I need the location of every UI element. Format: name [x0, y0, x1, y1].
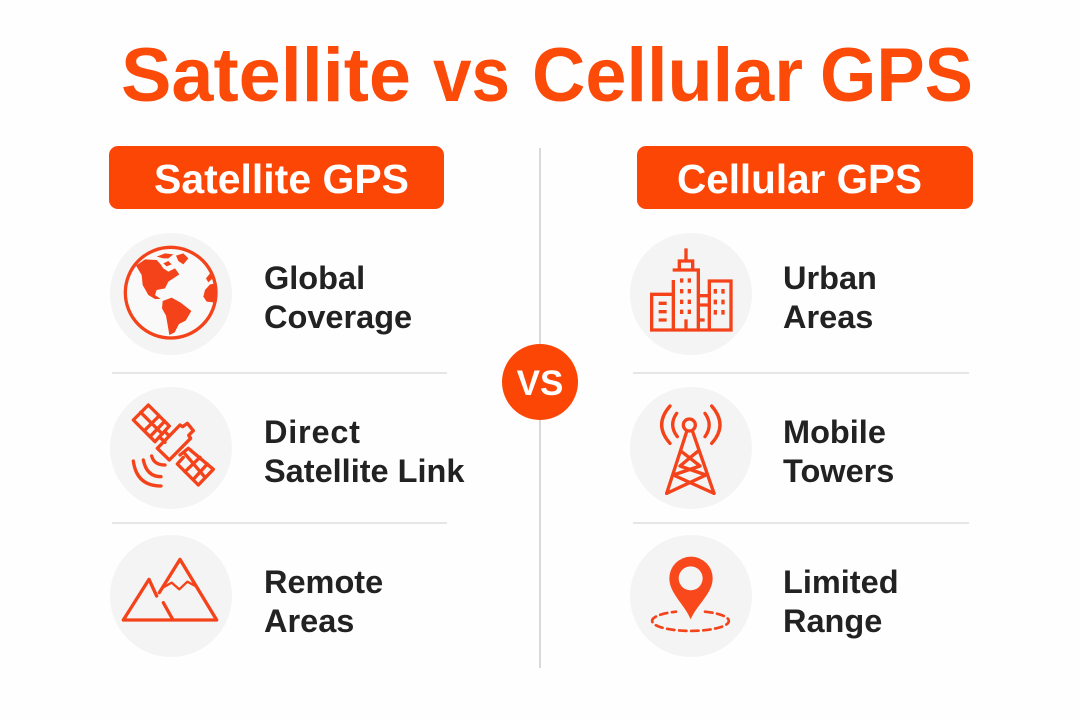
- text: Remote Areas: Areas: [264, 603, 354, 639]
- text: Mobile Towers: [783, 414, 894, 489]
- item: global coverage: [110, 233, 412, 355]
- vs badge: [502, 344, 578, 420]
- text: Global Coverage: Global: [264, 260, 365, 296]
- item: direct satellite link: [110, 387, 465, 509]
- heading: Satellite GPS: Satellite GPS: [154, 156, 409, 202]
- heading: Cellular GPS: Cellular GPS: [677, 156, 922, 202]
- icon: location pin with dashed range: [652, 557, 729, 631]
- text: Global Coverage: [264, 260, 412, 335]
- title: vs: [433, 33, 510, 118]
- text: Direct Satellite Link: Direct: [264, 414, 360, 450]
- title: Satellite: [121, 33, 411, 118]
- icon: city: [652, 248, 731, 330]
- text: Mobile Towers: Towers: [783, 453, 894, 489]
- item: remote areas: [110, 535, 383, 657]
- title: Cellular: [532, 33, 803, 118]
- text: Direct Satellite Link: Satellite Link: [264, 453, 465, 489]
- item: mobile towers: [630, 387, 894, 509]
- text: Remote Areas: Remote: [264, 564, 383, 600]
- text: Urban Areas: Urban: [783, 260, 877, 296]
- title: GPS: [820, 33, 973, 118]
- text: Global Coverage: Coverage: [264, 299, 412, 335]
- icon: mountains: [123, 559, 217, 620]
- text: Limited Range: Limited: [783, 564, 899, 600]
- vs badge: VS: [517, 364, 563, 403]
- item: limited range: [630, 535, 899, 657]
- center divider: [539, 148, 541, 668]
- text: Mobile Towers: Mobile: [783, 414, 886, 450]
- heading: Satellite GPS: [109, 146, 444, 209]
- text: Remote Areas: [264, 564, 383, 639]
- icon: satellite: [133, 405, 213, 486]
- text: Urban Areas: [783, 260, 877, 335]
- item: urban areas: [630, 233, 877, 355]
- icon: tower: [662, 406, 720, 493]
- icon: globe: [125, 247, 216, 338]
- panel: cellular GPS: [630, 146, 973, 657]
- panel: satellite GPS: [109, 146, 465, 657]
- text: Limited Range: Range: [783, 603, 882, 639]
- text: Urban Areas: Areas: [783, 299, 873, 335]
- text: Limited Range: [783, 564, 899, 639]
- text: Direct Satellite Link: [264, 414, 465, 489]
- heading: Cellular GPS: [637, 146, 973, 209]
